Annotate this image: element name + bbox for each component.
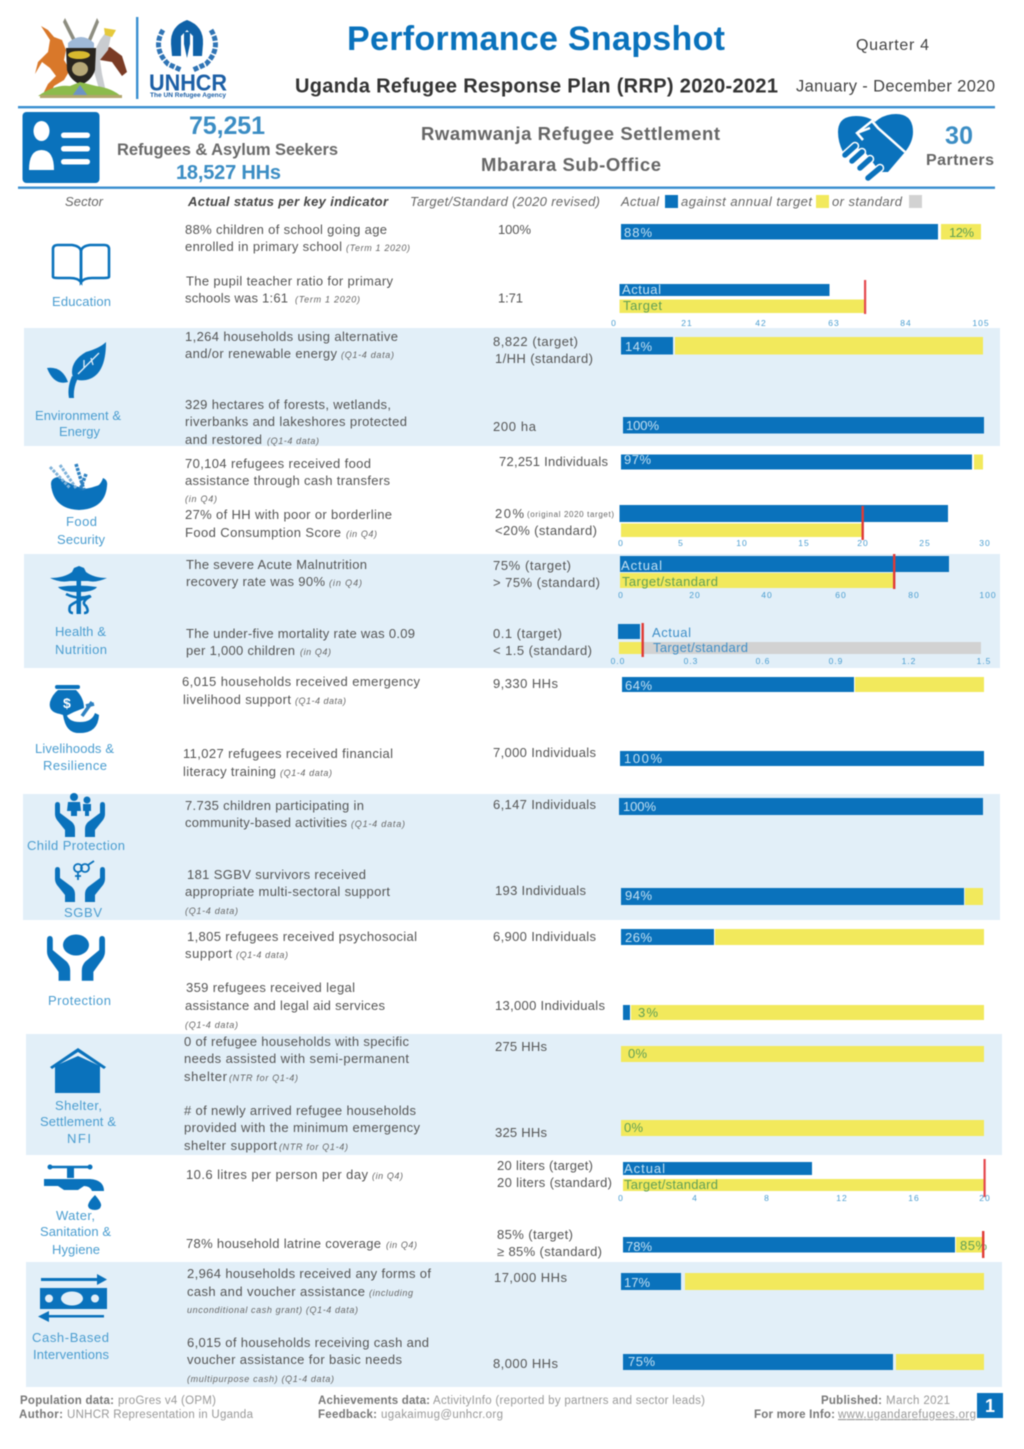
target: mortality <box>493 626 592 658</box>
chart: mortality: 0.0 <box>611 656 625 666</box>
indicator: semi-permanent shelter <box>184 1034 410 1084</box>
indicator: emergency livelihood: livelihood support <box>183 692 291 707</box>
chart: malnutrition: 0 <box>618 590 624 600</box>
indicator: malnutrition: The severe Acute Malnutrition <box>186 557 367 572</box>
target: mortality: < 1.5 (standard) <box>493 643 592 658</box>
indicator: malnutrition: (in Q4) <box>329 578 362 588</box>
panel: food security <box>50 452 991 548</box>
target: litres per person: 20 liters (target) <box>497 1158 593 1173</box>
indicator: semi-permanent shelter: needs assisted with semi-permanent <box>184 1051 409 1066</box>
indicator: malnutrition: recovery rate was 90% <box>186 574 325 589</box>
indicator: energy: (Q1-4 data) <box>341 350 394 360</box>
footer: publication: For more Info: <box>754 1409 835 1421</box>
indicator: food assistance: 70,104 refugees received food <box>185 456 371 471</box>
target: litres per person: 20 liters (standard) <box>497 1175 612 1190</box>
target: energy <box>493 334 593 366</box>
bar: semi-permanent shelter <box>621 1046 984 1062</box>
target: malnutrition: > 75% (standard) <box>493 575 600 590</box>
indicator: food assistance <box>185 456 390 504</box>
target: food consumption: (original 2020 target) <box>527 510 614 519</box>
footer: publication <box>754 1395 976 1421</box>
indicator: latrine coverage: (in Q4) <box>386 1240 417 1250</box>
sector label: Livelihoods & <box>35 741 114 756</box>
chart: mortality: Target/standard <box>653 640 748 655</box>
indicator: legal aid: assistance and legal aid services <box>185 998 386 1013</box>
panel: water, sanitation and hygiene <box>40 1158 991 1259</box>
sector label: SGBV <box>64 905 102 920</box>
target: latrine coverage <box>497 1227 602 1259</box>
indicator: psychosocial: 1,805 refugees received psychosocial <box>187 929 417 944</box>
chart: litres per person: 0 <box>618 1193 624 1203</box>
bar: emergency shelter: 0% <box>624 1120 643 1135</box>
target: psychosocial: 6,900 Individuals <box>493 929 596 944</box>
target: pupil teacher ratio: 1:71 <box>498 290 523 306</box>
chart: pupil teacher ratio: 63 <box>828 318 840 328</box>
icon: handshake heart <box>838 114 913 178</box>
indicator: food consumption: Food Consumption Score <box>185 525 341 540</box>
chart: litres per person: Actual <box>624 1161 665 1176</box>
target: forests: 200 ha <box>493 419 537 434</box>
chart: food consumption: 10 <box>736 538 748 548</box>
indicator: food consumption <box>185 507 392 540</box>
chart: pupil teacher ratio: 21 <box>681 318 693 328</box>
target: financial literacy: 7,000 Individuals <box>493 745 596 760</box>
bar: emergency shelter <box>621 1120 984 1136</box>
footer: achievements data: ActivityInfo (reported by partners and sector leads) <box>433 1395 705 1407</box>
logo: UNHCR <box>149 20 227 99</box>
page number <box>977 1393 1003 1418</box>
target: cash and voucher: 17,000 HHs <box>494 1270 568 1285</box>
target: enrolment: 100% <box>498 222 531 237</box>
chart: pupil teacher ratio <box>611 280 990 328</box>
chart: malnutrition: 20 <box>689 590 701 600</box>
indicator: financial literacy: 11,027 refugees received financial <box>183 746 393 761</box>
bar: energy: 14% <box>625 339 652 354</box>
icon: caduceus <box>50 566 107 614</box>
bar: financial literacy <box>620 751 984 766</box>
bar: forests <box>623 417 984 434</box>
vertical logo divider <box>136 17 138 99</box>
indicator: legal aid <box>185 980 386 1030</box>
indicator: forests: and restored <box>185 432 262 447</box>
chart: mortality <box>611 623 991 666</box>
column: sector: Sector <box>65 194 104 209</box>
sector label: Resilience <box>43 758 107 773</box>
indicator: cash and voucher: unconditional cash grant) (Q1-4 data) <box>187 1305 358 1315</box>
footer <box>19 1393 1003 1421</box>
target: mortality: 0.1 (target) <box>493 626 562 641</box>
icon: bowl with grain <box>50 464 107 510</box>
settlement name <box>421 123 720 175</box>
target: food assistance: 72,251 Individuals <box>499 454 608 469</box>
legend: or standard <box>832 194 903 209</box>
indicator: financial literacy: (Q1-4 data) <box>280 768 332 778</box>
chart: pupil teacher ratio: 84 <box>900 318 912 328</box>
indicator: enrolment: 88% children of school going age <box>185 222 387 237</box>
settlement name: Mbarara Sub-Office <box>481 154 661 175</box>
indicator: financial literacy <box>183 746 393 779</box>
indicator: basic needs: (multipurpose cash) (Q1-4 data) <box>187 1374 334 1384</box>
indicator: SGBV support <box>185 867 390 916</box>
indicator: enrolment: (Term 1 2020) <box>346 243 410 253</box>
logo: Uganda coat of arms <box>35 18 127 98</box>
icon: money bag and bowl: $ <box>63 695 71 711</box>
chart: latrine coverage: 78% <box>626 1239 652 1254</box>
icon: leaf sprout <box>47 342 106 398</box>
chart: food consumption: 25 <box>919 538 931 548</box>
indicator: emergency livelihood <box>182 674 420 707</box>
target: malnutrition <box>493 558 600 590</box>
household count: 18,527 HHs <box>176 162 281 184</box>
sector label: Cash-Based <box>32 1330 109 1345</box>
icon: open book <box>53 245 109 282</box>
indicator: legal aid: (Q1-4 data) <box>185 1020 238 1030</box>
bar: forests: 100% <box>626 418 659 433</box>
bar: basic needs <box>623 1354 984 1370</box>
indicator: basic needs: voucher assistance for basic needs <box>187 1352 402 1367</box>
indicator: child activities: 7.735 children participating in <box>185 798 364 813</box>
bar: enrolment: 12% <box>949 225 974 240</box>
UNHCR tagline: The UN Refugee Agency <box>150 92 226 99</box>
chart: malnutrition: 60 <box>835 590 847 600</box>
sector label: Health & <box>55 624 106 639</box>
table header <box>65 194 922 209</box>
panel: health and nutrition <box>24 554 1000 668</box>
band <box>26 1262 1002 1387</box>
panel: livelihoods and resilience <box>35 674 984 779</box>
bar: food assistance: 97% <box>624 452 651 467</box>
indicator: SGBV support: appropriate multi-sectoral support <box>185 884 390 899</box>
target: emergency shelter: 325 HHs <box>495 1125 548 1140</box>
bar: legal aid <box>623 1005 984 1020</box>
sector label: Child Protection <box>27 838 125 853</box>
chart: litres per person: 4 <box>692 1193 698 1203</box>
indicator: pupil teacher ratio: The pupil teacher ratio for primary <box>186 274 394 288</box>
page number: 1 <box>985 1396 995 1416</box>
bar: psychosocial <box>621 929 984 945</box>
indicator: pupil teacher ratio: schools was 1:61 <box>185 290 288 306</box>
footer: population data: Author: <box>19 1409 63 1421</box>
indicator: emergency livelihood: (Q1-4 data) <box>295 696 346 706</box>
indicator: litres per person: 10.6 litres per person per day <box>186 1167 368 1182</box>
quarter label: Quarter 4 <box>856 37 929 54</box>
indicator: cash and voucher <box>187 1266 431 1315</box>
indicator: semi-permanent shelter: 0 of refugee households with specific <box>184 1034 410 1049</box>
icon: person card <box>22 112 100 183</box>
chart: litres per person: 20 <box>979 1193 991 1203</box>
indicator: energy <box>185 329 398 361</box>
indicator: emergency livelihood: 6,015 households received emergency <box>182 674 420 689</box>
indicator: emergency shelter: # of newly arrived refugee households <box>184 1103 416 1118</box>
icon: hands around person <box>47 934 105 981</box>
chart: food consumption: 5 <box>678 538 684 548</box>
indicator: semi-permanent shelter: (NTR for Q1-4) <box>229 1073 298 1083</box>
indicator: mortality: The under-five mortality rate was 0.09 <box>186 626 415 641</box>
indicator: enrolment: enrolled in primary school <box>185 239 342 254</box>
footer: achievements data: ugakaimug@unhcr.org <box>381 1409 503 1421</box>
settlement name: Rwamwanja Refugee Settlement <box>421 123 720 144</box>
sector label: Food <box>66 514 97 529</box>
chart: pupil teacher ratio: Target <box>623 298 662 313</box>
panel: education <box>52 222 990 328</box>
indicator: enrolment <box>185 222 410 254</box>
sector label <box>40 1098 116 1146</box>
indicator: forests: (Q1-4 data) <box>267 436 319 446</box>
bar: semi-permanent shelter: 0% <box>628 1046 647 1061</box>
target: latrine coverage: ≥ 85% (standard) <box>497 1244 602 1259</box>
sector label <box>40 1208 111 1257</box>
footer: population data: proGres v4 (OPM) <box>118 1395 216 1407</box>
target: food consumption: <20% (standard) <box>495 523 597 538</box>
target: semi-permanent shelter: 275 HHs <box>495 1039 548 1054</box>
sector label <box>35 408 121 439</box>
bar: child activities <box>619 798 983 815</box>
indicator: psychosocial: (Q1-4 data) <box>236 950 288 960</box>
indicator: SGBV support: 181 SGBV survivors received <box>187 867 366 882</box>
bar: legal aid: 3% <box>638 1005 658 1020</box>
bar: food assistance <box>621 452 983 470</box>
indicator: food assistance: (in Q4) <box>185 494 217 504</box>
target: basic needs: 8,000 HHs <box>493 1356 558 1371</box>
UNHCR emblem <box>159 20 215 70</box>
sector label: Energy <box>59 424 100 439</box>
indicator: pupil teacher ratio: (Term 1 2020) <box>295 294 360 304</box>
column: target: Target/Standard (2020 revised) <box>410 194 600 209</box>
indicator: latrine coverage: 78% household latrine coverage <box>186 1236 381 1251</box>
bar: energy <box>621 337 983 354</box>
chart: latrine coverage <box>623 1231 987 1258</box>
footer: achievements data: Achievements data: <box>318 1395 430 1407</box>
footer: population data: UNHCR Representation in Uganda <box>67 1409 254 1421</box>
footer: publication: Published: <box>821 1395 882 1407</box>
indicator: forests: riverbanks and lakeshores protected <box>185 414 407 429</box>
sector label: Shelter, <box>55 1098 102 1113</box>
sector label: Environment & <box>35 408 121 423</box>
title: Performance Snapshot <box>347 20 725 58</box>
indicator: child activities <box>185 798 405 830</box>
sector label <box>32 1330 110 1362</box>
sector label <box>55 624 107 657</box>
footer: population data <box>19 1395 254 1421</box>
indicator: emergency shelter: provided with the minimum emergency <box>184 1120 420 1135</box>
target: litres per person <box>497 1158 612 1190</box>
UNHCR wordmark: UNHCR <box>149 70 227 96</box>
population caption: Refugees & Asylum Seekers <box>117 141 338 159</box>
bar: cash and voucher: 17% <box>624 1275 650 1290</box>
indicator: pupil teacher ratio <box>185 274 394 306</box>
sector label: Hygiene <box>52 1242 100 1257</box>
bar: psychosocial: 26% <box>625 930 652 945</box>
chart: mortality: 1.5 <box>977 656 991 666</box>
indicator: child activities: community-based activities <box>185 815 348 830</box>
sector label: Protection <box>48 993 111 1008</box>
indicator: financial literacy: literacy training <box>183 764 276 779</box>
footer: achievements data <box>318 1395 705 1421</box>
band <box>24 554 1000 668</box>
bar: enrolment: 88% <box>624 225 652 240</box>
chart: pupil teacher ratio: Actual <box>622 282 661 297</box>
indicator: mortality: (in Q4) <box>300 647 331 657</box>
sector label: Interventions <box>33 1347 110 1362</box>
chart: malnutrition: 100 <box>979 590 997 600</box>
partners count: Partners <box>926 152 994 169</box>
indicator: basic needs <box>187 1335 429 1384</box>
icon: money bag and bowl <box>50 685 99 733</box>
bar: enrolment <box>621 224 981 240</box>
target: energy: 1/HH (standard) <box>495 351 593 366</box>
sector label <box>57 514 106 547</box>
panel: cash-based interventions <box>26 1262 1002 1387</box>
footer: publication: www.ugandarefugees.org <box>837 1409 976 1421</box>
icon: tap and drop <box>44 1164 104 1210</box>
legend: Actual <box>620 194 660 209</box>
chart: mortality: 0.3 <box>684 656 698 666</box>
summary rule <box>18 186 995 189</box>
indicator: mortality <box>186 626 415 658</box>
column: actual status: Actual status per key indicator <box>187 194 389 209</box>
chart: pupil teacher ratio: 0 <box>611 318 617 328</box>
panel: protection <box>47 929 984 1030</box>
indicator: energy: and/or renewable energy <box>185 346 338 361</box>
indicator: energy: 1,264 households using alternative <box>185 329 398 344</box>
chart: mortality: Actual <box>652 625 691 640</box>
bar: emergency livelihood <box>622 677 984 693</box>
chart: food consumption: 15 <box>798 538 810 548</box>
sector label: Water, <box>56 1208 95 1223</box>
chart: malnutrition <box>618 554 997 600</box>
icon: banknote with arrows <box>38 1274 107 1322</box>
chart: mortality: 0.9 <box>829 656 843 666</box>
icon: house <box>50 1048 106 1093</box>
band <box>23 794 1000 920</box>
chart: litres per person: 8 <box>764 1193 770 1203</box>
target: child activities: 6,147 Individuals <box>493 797 596 812</box>
refugee count: 75,251 <box>189 112 265 140</box>
chart: mortality: 1.2 <box>902 656 916 666</box>
footer: achievements data: Feedback: <box>318 1409 377 1421</box>
footer: population data: Population data: <box>20 1395 114 1407</box>
chart: pupil teacher ratio: 42 <box>755 318 767 328</box>
bar: financial literacy: 100% <box>624 751 662 766</box>
chart: mortality: 0.6 <box>756 656 770 666</box>
chart: food consumption <box>618 505 991 548</box>
indicator: psychosocial <box>185 929 417 961</box>
bar: emergency livelihood: 64% <box>625 678 652 693</box>
bar: child activities: 100% <box>623 799 656 814</box>
chart: food consumption: 30 <box>979 538 991 548</box>
target: food consumption <box>495 506 614 538</box>
chart: litres per person: 16 <box>908 1193 920 1203</box>
legend <box>620 194 922 209</box>
chart: malnutrition: Target/standard <box>622 574 718 589</box>
indicator: emergency shelter: shelter support <box>184 1138 277 1153</box>
indicator: SGBV support: (Q1-4 data) <box>185 906 238 916</box>
indicator: cash and voucher: 2,964 households received any forms of <box>187 1266 431 1281</box>
indicator: food consumption: 27% of HH with poor or borderline <box>185 507 392 522</box>
bar: basic needs: 75% <box>628 1354 655 1369</box>
indicator: legal aid: 359 refugees received legal <box>186 980 355 995</box>
indicator: food consumption: (in Q4) <box>346 529 377 539</box>
sector label: Security <box>57 532 106 547</box>
indicator: forests <box>185 397 407 447</box>
footer: publication: March 2021 <box>886 1395 950 1407</box>
bar: SGBV support <box>621 888 983 905</box>
indicator: child activities: (Q1-4 data) <box>351 819 405 829</box>
band <box>26 1034 1002 1155</box>
chart: litres per person: 12 <box>836 1193 848 1203</box>
chart: malnutrition: 80 <box>908 590 920 600</box>
chart: litres per person <box>618 1159 991 1203</box>
indicator: psychosocial: support <box>185 946 232 961</box>
sector label: NFI <box>67 1131 91 1146</box>
header rule <box>18 106 995 108</box>
indicator: emergency shelter <box>184 1103 420 1153</box>
target: latrine coverage: 85% (target) <box>497 1227 573 1242</box>
indicator: semi-permanent shelter: shelter <box>184 1069 228 1084</box>
chart: food consumption: 0 <box>618 538 624 548</box>
target: legal aid: 13,000 Individuals <box>495 998 606 1013</box>
chart: malnutrition: 40 <box>761 590 773 600</box>
indicator: forests: 329 hectares of forests, wetlands, <box>185 397 391 412</box>
subtitle: Uganda Refugee Response Plan (RRP) 2020-2021 <box>295 76 778 98</box>
indicator: basic needs: 6,015 of households receiving cash and <box>187 1335 429 1350</box>
indicator: cash and voucher: (including <box>369 1288 413 1298</box>
indicator: emergency shelter: (NTR for Q1-4) <box>279 1142 348 1152</box>
population figures <box>117 112 338 184</box>
bar: SGBV support: 94% <box>625 888 652 903</box>
sector label: Settlement & <box>40 1114 116 1129</box>
target: energy: 8,822 (target) <box>493 334 578 349</box>
indicator: malnutrition <box>186 557 367 589</box>
legend: against annual target <box>681 194 813 209</box>
panel: shelter, settlement and NFI <box>26 1034 1002 1155</box>
chart: food consumption: 20 <box>857 538 869 548</box>
icon: hands holding children <box>55 793 105 837</box>
date range: January - December 2020 <box>796 78 995 96</box>
sector label: Education <box>52 294 111 309</box>
indicator: food assistance: assistance through cash transfers <box>185 473 390 488</box>
sector label: Nutrition <box>55 642 107 657</box>
sector label <box>35 741 114 773</box>
chart: latrine coverage: 85% <box>960 1238 987 1253</box>
target: food consumption: 20% <box>495 506 524 521</box>
partners count: 30 <box>945 122 973 150</box>
indicator: mortality: per 1,000 children <box>186 643 295 658</box>
indicator: litres per person: (in Q4) <box>372 1171 403 1181</box>
sector label: Sanitation & <box>40 1224 111 1239</box>
bar: cash and voucher <box>621 1273 984 1290</box>
target: emergency livelihood: 9,330 HHs <box>493 676 558 691</box>
panel: environment and energy <box>24 328 1000 447</box>
partners count <box>926 122 994 169</box>
panel: child protection and SGBV <box>23 793 1000 920</box>
chart: pupil teacher ratio: 105 <box>972 318 990 328</box>
band <box>24 328 1000 446</box>
indicator: cash and voucher: cash and voucher assistance <box>187 1284 365 1299</box>
target: malnutrition: 75% (target) <box>493 558 571 573</box>
chart: malnutrition: Actual <box>621 558 662 573</box>
target: SGBV support: 193 Individuals <box>495 883 586 898</box>
chart: litres per person: Target/standard <box>624 1177 718 1192</box>
icon: hands holding gender symbols <box>55 861 105 902</box>
